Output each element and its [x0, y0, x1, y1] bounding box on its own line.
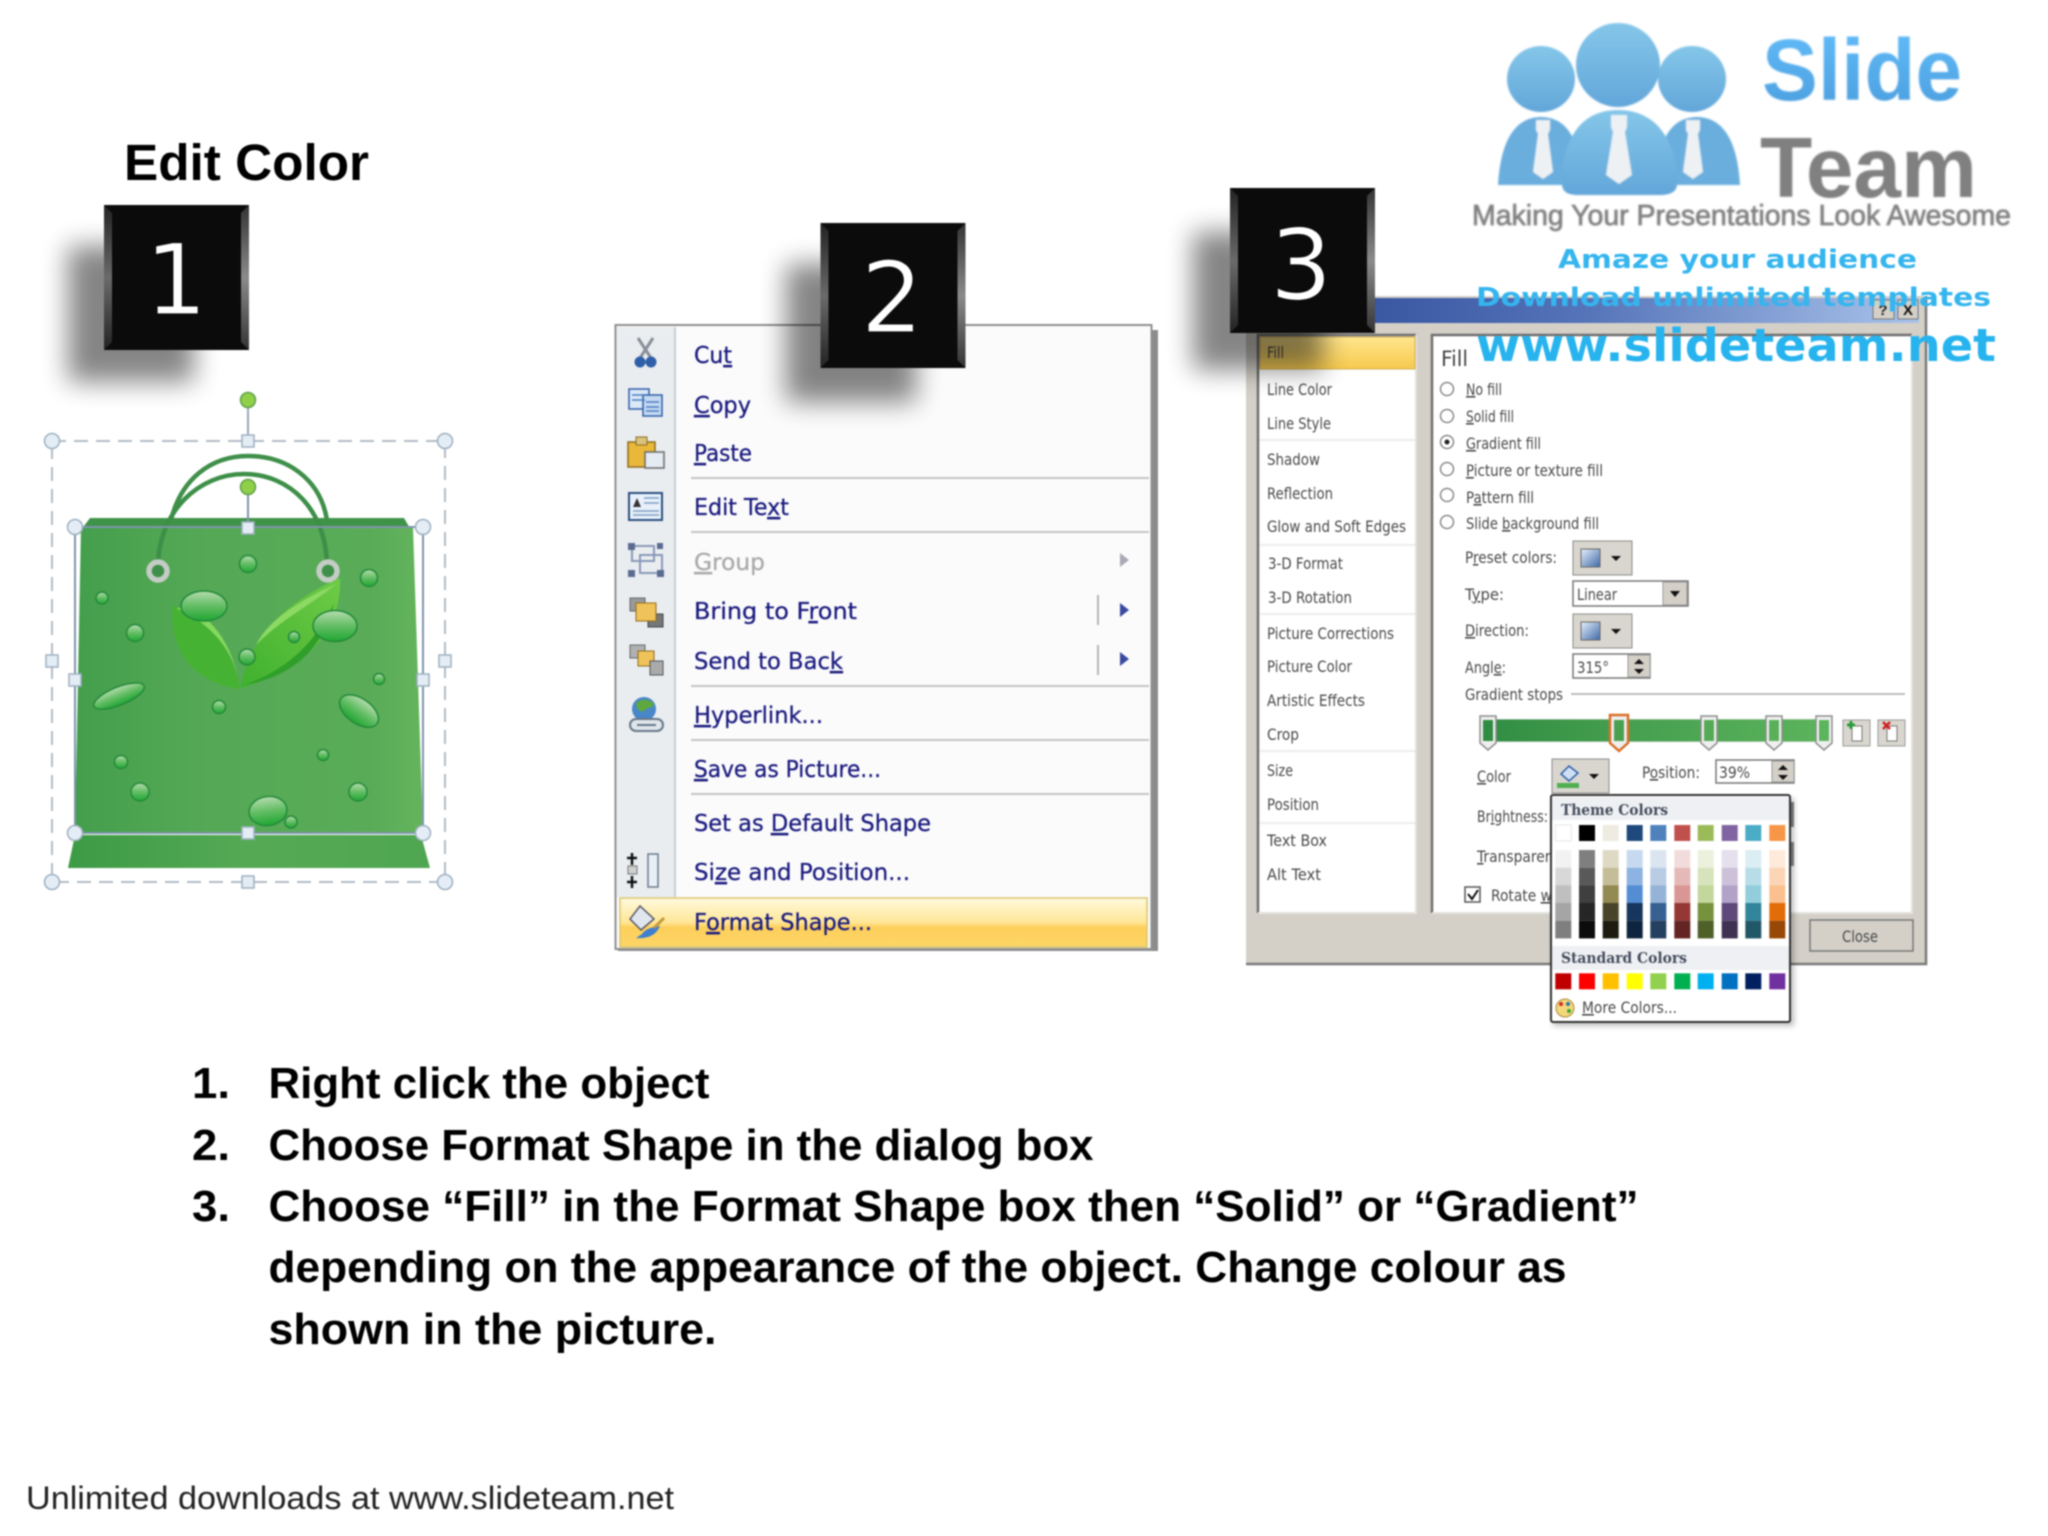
watermark text: [1476, 245, 1996, 372]
position spinner: [1716, 760, 1794, 783]
position spinner: 39%: [1719, 763, 1750, 782]
amaze line: Amaze your audience: [1558, 245, 1917, 275]
fill options text: Pattern fill: [1466, 488, 1534, 507]
fill options text: Preset colors:: [1465, 548, 1557, 567]
category list: Picture Color: [1267, 657, 1352, 676]
gradient stops rule: [1571, 693, 1905, 695]
inner selection frame: [75, 493, 423, 833]
theme colors header: [1552, 797, 1789, 820]
website line: www.slideteam.net: [1476, 319, 1996, 372]
icon: edit text: [629, 493, 662, 520]
rotation stem outer: [247, 406, 249, 441]
theme color shades: [1555, 850, 1785, 938]
angle spinner: [1573, 654, 1650, 678]
category list: Picture Corrections: [1267, 624, 1394, 643]
number: 1: [145, 224, 207, 338]
icon: palette: [1556, 999, 1574, 1017]
panel: format shape dialog: [1246, 296, 1926, 1026]
category list: Crop: [1267, 725, 1299, 744]
fill options text: Color: [1477, 767, 1511, 786]
side handles: [46, 435, 451, 888]
bag body: [75, 527, 423, 833]
menu gutter: [617, 327, 674, 897]
category list: Reflection: [1267, 484, 1333, 503]
menu items text: Save as Picture...: [694, 757, 881, 783]
theme color row: [1555, 825, 1785, 841]
preset colors button: [1573, 541, 1632, 575]
fill heading: Fill: [1441, 347, 1468, 371]
fill options text: Transparency:: [1476, 847, 1573, 866]
step 3: [192, 1182, 1638, 1354]
dialog frame edges: [1246, 296, 1926, 964]
badge shadow: [786, 264, 916, 402]
type combo box: [1573, 581, 1688, 606]
bevels: [104, 205, 249, 350]
leaves: [173, 578, 340, 689]
menu items text: Bring to Front: [694, 599, 857, 625]
direction button: [1573, 614, 1632, 648]
fill options text: Brightness:: [1477, 807, 1548, 826]
more colors link: More Colors...: [1582, 998, 1677, 1017]
category list: Position: [1267, 795, 1319, 814]
gradient bar: [1480, 719, 1832, 742]
fill options text: [1464, 380, 1700, 905]
dialog frame: [1246, 296, 1926, 964]
menu shadow: [618, 330, 1158, 951]
standard colors label: Standard Colors: [1561, 949, 1687, 967]
title: Edit Color: [124, 134, 369, 191]
eyelets: [149, 562, 337, 580]
add stop button: [1843, 720, 1870, 746]
icon: cut: [634, 338, 656, 368]
panel: context menu: [616, 325, 1158, 951]
step 3: depending on the appearance of the object. Change colour as: [268, 1243, 1566, 1292]
close button: Close: [1842, 927, 1878, 946]
category list: Artistic Effects: [1267, 691, 1365, 710]
submenu arrows: [1098, 553, 1129, 675]
badge 3: [1193, 188, 1375, 370]
icon: paste: [628, 437, 664, 468]
footer: Unlimited downloads at www.slideteam.net: [26, 1480, 674, 1516]
menu items text: Set as Default Shape: [694, 811, 931, 837]
fill options text: Solid fill: [1466, 407, 1514, 426]
fill options text: Picture or texture fill: [1466, 461, 1603, 480]
category list: Text Box: [1266, 831, 1327, 850]
icon: group: [628, 543, 664, 577]
logo word team: Team: [1760, 121, 1977, 216]
menu items text: Edit Text: [694, 495, 789, 521]
badge 1: [68, 205, 249, 382]
corner handles: [44, 434, 452, 890]
menu items text: Size and Position...: [694, 860, 910, 886]
theme colors label: Theme Colors: [1561, 801, 1668, 819]
bag front handle: [158, 474, 327, 568]
category list: Fill: [1267, 343, 1284, 362]
gutter divider: [674, 327, 676, 897]
badge shadow: [1193, 232, 1323, 370]
rotation handles: [240, 392, 256, 494]
number: 2: [861, 242, 923, 356]
category list: Size: [1267, 761, 1293, 780]
radio buttons: [1440, 382, 1454, 528]
menu items text: Cut: [694, 343, 732, 369]
step 3: 3.: [192, 1182, 230, 1231]
icon: hyperlink: [630, 697, 663, 731]
icon: size and position: [627, 853, 658, 888]
hidden spinner edges: [1786, 802, 1794, 866]
remove stop button: [1878, 720, 1905, 746]
menu items text: Copy: [694, 393, 751, 419]
menu items text: Group: [694, 550, 765, 576]
title buttons: X: [1903, 302, 1913, 319]
menu items text: Paste: [694, 441, 752, 467]
standard colors header: [1552, 946, 1789, 970]
numbered instructions: [192, 1059, 1638, 1354]
type combo box: Linear: [1577, 585, 1617, 604]
close button: [1810, 920, 1913, 951]
fill options text: No fill: [1466, 380, 1502, 399]
fill options text: Slide background fill: [1466, 514, 1599, 533]
icon: team of three people: [1498, 23, 1740, 195]
fill options text: Angle:: [1465, 658, 1506, 677]
fill options text: Position:: [1642, 763, 1700, 782]
menu items text: Send to Back: [694, 649, 844, 675]
category list: 3-D Rotation: [1268, 588, 1352, 607]
color picker popup: [1551, 795, 1794, 1026]
fill options text: Direction:: [1465, 621, 1529, 640]
step 2: Choose Format Shape in the dialog box: [268, 1121, 1094, 1170]
item highlight: [620, 898, 1147, 947]
step 3: Choose “Fill” in the Format Shape box then “Solid” or “Gradient”: [268, 1182, 1638, 1231]
step 1: Right click the object: [268, 1059, 710, 1108]
category list: [1258, 335, 1416, 913]
title buttons: ?: [1878, 302, 1888, 319]
badge tile: [1230, 188, 1375, 333]
menu items text: Format Shape...: [694, 910, 872, 936]
category list: Line Style: [1267, 414, 1331, 433]
category list: Alt Text: [1267, 865, 1321, 884]
menu items text: [694, 343, 931, 936]
icon: format shape: [630, 906, 664, 938]
dialog title bar: [1247, 298, 1919, 323]
rotate checkbox: [1465, 887, 1480, 902]
outer selection frame: [52, 441, 445, 882]
standard color row: [1555, 973, 1785, 989]
gradient stop markers: [1480, 715, 1832, 751]
title buttons: [1873, 300, 1918, 319]
category list: 3-D Format: [1268, 554, 1343, 573]
fill options panel: [1432, 335, 1912, 913]
icon: copy: [629, 389, 662, 416]
bag flap: [81, 518, 411, 530]
logo tagline: Making Your Presentations Look Awesome: [1472, 200, 2011, 232]
number: 3: [1270, 209, 1332, 323]
icon: bring to front: [630, 598, 663, 627]
download line: Download unlimited templates: [1476, 283, 1991, 313]
bag back handle: [170, 456, 327, 524]
bevels: [820, 223, 966, 368]
menu items text: Hyperlink...: [694, 703, 823, 729]
menu body: [616, 325, 1152, 949]
badge tile: [104, 205, 249, 350]
separators: [691, 478, 1149, 794]
category list: Shadow: [1267, 450, 1320, 469]
popup shadow: [1553, 798, 1794, 1026]
logo: slide team: [1472, 22, 2011, 232]
color button: [1552, 759, 1609, 793]
fill options text: Type:: [1464, 585, 1504, 604]
badge tile: [820, 223, 966, 368]
icon: send to back: [630, 645, 663, 675]
bag bottom fold: [68, 835, 430, 868]
category list: Line Color: [1267, 380, 1332, 399]
badge 2: [786, 223, 966, 402]
step 3: shown in the picture.: [268, 1305, 716, 1354]
bevels: [1230, 188, 1375, 333]
step 2: 2.: [192, 1121, 230, 1170]
panel: selected shopping bag object: [44, 392, 452, 890]
angle spinner: 315°: [1577, 658, 1609, 677]
popup body: [1551, 795, 1790, 1022]
badge shadow: [68, 246, 194, 382]
fill options text: Rotate with shape: [1491, 886, 1616, 905]
category list: Glow and Soft Edges: [1267, 517, 1406, 536]
water droplets: [91, 556, 384, 828]
logo word slide: Slide: [1762, 22, 1962, 119]
step 1: 1.: [192, 1059, 230, 1108]
fill options text: Gradient stops: [1465, 685, 1563, 704]
fill options text: Gradient fill: [1466, 434, 1541, 453]
